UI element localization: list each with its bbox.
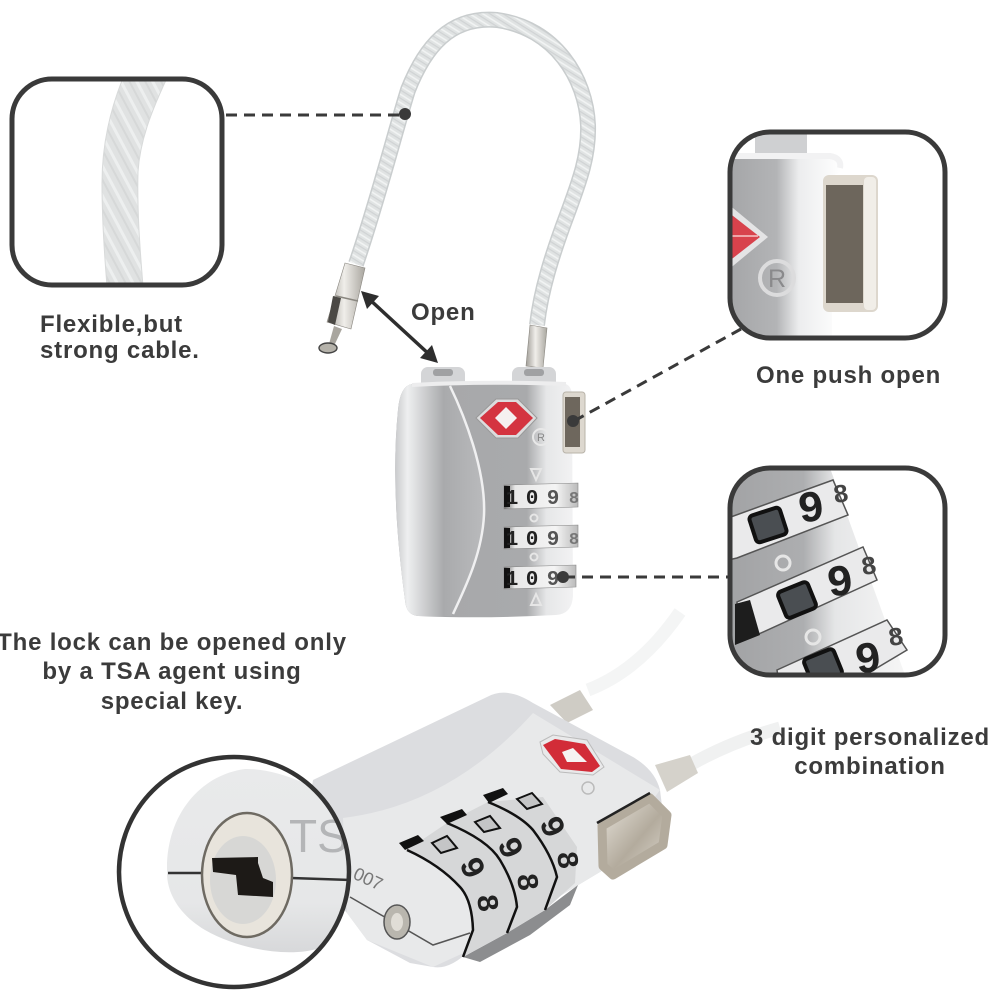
- dial row 2: 9: [547, 529, 559, 552]
- label: open: Open: [411, 299, 476, 326]
- dials: 9: [488, 832, 530, 865]
- dial row 3: 1: [506, 569, 518, 592]
- dial row 1: 1: [506, 488, 518, 511]
- dials: 9: [530, 811, 572, 844]
- label: 3 digit combination: [750, 724, 990, 780]
- label: TSA key: The lock can be opened only: [0, 629, 347, 656]
- registered mark: [582, 782, 594, 794]
- label: TSA key: [0, 629, 347, 715]
- dial B: [735, 547, 879, 645]
- dial row 1: [504, 483, 579, 511]
- TSA engraving: TSA: [289, 810, 379, 862]
- ferrules: [550, 690, 593, 723]
- dials: [399, 788, 583, 962]
- panel: slider detail: R: [768, 265, 786, 293]
- panel: cable detail: [12, 78, 222, 286]
- cable fixed ferrule: [526, 325, 547, 368]
- registered mark: R: [537, 432, 545, 444]
- key slot: [212, 857, 273, 897]
- dial row 2: 0: [526, 529, 538, 552]
- panel: dial detail: [728, 468, 945, 690]
- dial row 2: [504, 525, 579, 552]
- slider button: [563, 392, 585, 453]
- cable: [356, 20, 588, 325]
- dial A: 9: [795, 484, 828, 537]
- slider: [597, 793, 667, 875]
- cable free end pin: [319, 263, 365, 353]
- connector: slider callout: [567, 329, 741, 427]
- lock body: [395, 382, 573, 617]
- panel: slider detail: [728, 132, 945, 338]
- rivet: [384, 905, 410, 939]
- label: flexible cable: Flexible,but: [40, 311, 183, 338]
- dial row 3: 0: [526, 569, 538, 592]
- main lock with cable: [319, 20, 588, 617]
- dial A: 8: [831, 479, 851, 511]
- connector: cable callout: [226, 108, 411, 120]
- label: TSA key: special key.: [101, 688, 243, 715]
- dial C: 9: [852, 635, 885, 688]
- label: flexible cable: strong cable.: [40, 337, 200, 364]
- dial row 2: 1: [506, 529, 518, 552]
- registered mark: [533, 429, 549, 445]
- label: one push open: One push open: [756, 362, 941, 389]
- dial A: [728, 479, 851, 560]
- dials: 8: [547, 849, 583, 872]
- dials: 8: [467, 892, 503, 915]
- dial row 3: [504, 565, 576, 592]
- dial B: 8: [859, 551, 879, 583]
- TSA red diamond logo: [476, 399, 537, 438]
- dial B: 9: [824, 558, 857, 611]
- body left panel: [395, 384, 483, 616]
- connector: dial callout: [557, 571, 731, 583]
- faded cables: [588, 612, 680, 690]
- bottom lock: [300, 612, 780, 967]
- red logo corner: [732, 208, 768, 266]
- label: flexible cable: [40, 311, 200, 364]
- slider large: [823, 175, 878, 312]
- dials: 9: [450, 852, 492, 885]
- lock posts: [421, 367, 556, 389]
- label: 3 digit combination: 3 digit personalized: [750, 724, 990, 751]
- dial row 1: 9: [547, 488, 559, 511]
- dial row 2: 8: [569, 531, 579, 550]
- arrow: open distance: [361, 291, 438, 363]
- dial C: 8: [886, 622, 906, 654]
- dial row 1: 8: [569, 490, 579, 509]
- dial C: [776, 619, 908, 672]
- engraved serial: 007: [350, 863, 386, 894]
- dial row 1: 0: [526, 488, 538, 511]
- registered mark large: [760, 261, 794, 295]
- inset: key cylinder: [119, 757, 379, 987]
- body: [300, 693, 665, 967]
- dials: 8: [507, 871, 543, 894]
- dial row 3: 9: [547, 569, 559, 592]
- triangle marks: [531, 469, 541, 480]
- red logo: [540, 735, 604, 775]
- label: TSA key: by a TSA agent using: [42, 658, 302, 685]
- label: 3 digit combination: combination: [794, 753, 946, 780]
